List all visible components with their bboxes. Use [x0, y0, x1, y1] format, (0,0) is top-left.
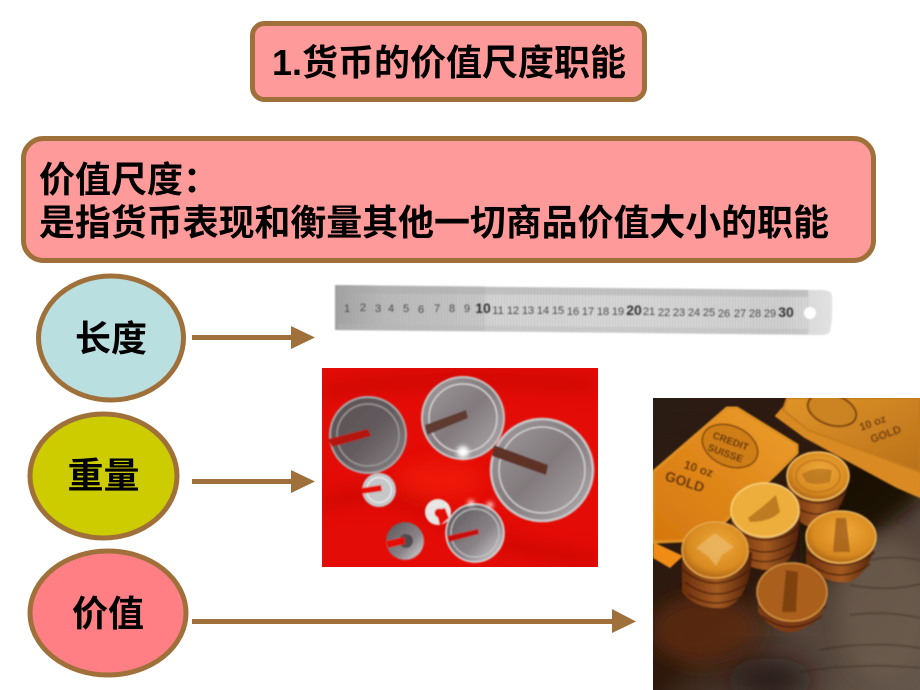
ruler numbers: 19 — [612, 306, 624, 318]
ruler numbers: 18 — [597, 306, 609, 318]
definition panel — [24, 138, 874, 260]
ruler numbers: 4 — [388, 303, 394, 315]
ruler numbers: 20 — [626, 302, 642, 318]
weight 7 — [425, 499, 451, 526]
ruler numbers: 3 — [375, 303, 381, 315]
weight 1 — [328, 397, 406, 473]
definition text: 是指货币表现和衡量其他一切商品价值大小的职能 — [39, 202, 829, 243]
photo: gold bars and coins — [650, 388, 920, 690]
ruler numbers: 25 — [703, 307, 715, 319]
ruler numbers — [344, 300, 794, 320]
ruler numbers: 2 — [360, 302, 366, 314]
ruler numbers: 27 — [734, 308, 746, 320]
gold bar right: 10 oz — [858, 413, 888, 434]
gold bar right — [776, 388, 920, 497]
ruler numbers: 26 — [718, 308, 730, 320]
photo: steel ruler — [335, 285, 832, 335]
oval: value — [30, 551, 186, 675]
coin stack: top — [787, 452, 849, 528]
weight 2 — [422, 377, 504, 459]
ruler numbers: 22 — [658, 307, 670, 319]
arrow: value to gold photo — [192, 609, 636, 633]
ruler numbers: 21 — [643, 306, 655, 318]
arrow: weight to weights photo — [192, 470, 315, 493]
oval: weight: 重量 — [67, 455, 140, 496]
ruler numbers: 13 — [522, 305, 534, 317]
gold bar left — [653, 408, 797, 568]
title box — [252, 24, 644, 100]
photo: weights on red cloth — [322, 368, 598, 567]
weight 5 — [386, 522, 424, 560]
coin stack: maple — [682, 522, 752, 608]
ruler numbers: 6 — [418, 304, 424, 316]
oval: value: 价值 — [72, 593, 144, 634]
gold bar left: SUISSE — [706, 442, 745, 465]
oval: length: 长度 — [75, 318, 147, 359]
arrow: length to ruler — [192, 326, 315, 349]
ruler numbers: 14 — [537, 305, 549, 317]
ruler numbers: 12 — [507, 305, 519, 317]
ruler numbers: 17 — [582, 306, 594, 318]
table shadow — [725, 658, 815, 690]
ruler numbers: 7 — [434, 303, 440, 315]
oval: weight — [30, 414, 177, 538]
ruler numbers: 15 — [552, 305, 564, 317]
gold bar left: GOLD — [663, 468, 706, 495]
ruler numbers: 8 — [449, 303, 455, 315]
ruler numbers: 16 — [567, 306, 579, 318]
oval: length — [38, 276, 184, 400]
ruler numbers: 1 — [344, 303, 350, 315]
weight 6 — [446, 504, 504, 562]
ruler numbers: 5 — [403, 303, 409, 315]
ruler numbers: 30 — [778, 304, 794, 320]
weight 3 — [491, 419, 593, 521]
definition heading: 价值尺度： — [39, 159, 219, 200]
ruler numbers: 23 — [673, 307, 685, 319]
ruler numbers: 24 — [688, 307, 700, 319]
highlights — [457, 446, 493, 508]
ruler numbers: 10 — [475, 300, 491, 316]
gold bar left: 10 oz — [682, 458, 715, 480]
ruler numbers: 28 — [749, 308, 761, 320]
ruler numbers: 11 — [492, 305, 504, 317]
weight 4 — [361, 473, 396, 507]
ruler numbers: 9 — [464, 303, 470, 315]
gold bar left: CREDIT — [711, 430, 750, 454]
gold bar right: GOLD — [869, 424, 903, 446]
title box: 1.货币的价值尺度职能 — [272, 42, 626, 83]
coin stack: krugerrand — [731, 483, 800, 570]
ruler numbers: 29 — [764, 308, 776, 320]
coin stack: bottom — [757, 563, 827, 632]
coin stack: right — [806, 511, 876, 582]
